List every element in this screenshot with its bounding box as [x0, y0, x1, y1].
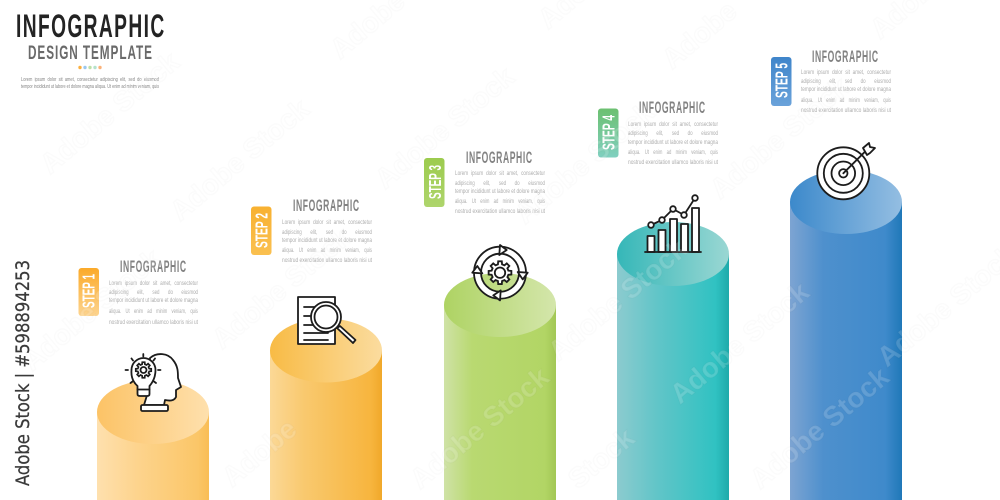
- step 5 block: nostrud exercitation ullamco laboris nisi ut: [801, 108, 891, 114]
- step 1 block: adipiscing elit, sed do eiusmod: [109, 290, 198, 296]
- icon: head with light bulb: [126, 354, 181, 411]
- step 3 block: [424, 148, 546, 215]
- step 1 block: aliqua. Ut enim ad minim veniam, quis: [109, 309, 198, 315]
- cylinder 3: [444, 273, 556, 500]
- step 4 block: Lorem ipsum dolor sit amet, consectetur: [628, 122, 718, 128]
- step 2 block: nostrud exercitation ullamco laboris nisi ut: [282, 258, 372, 264]
- step 2 block: [251, 196, 373, 264]
- title block: INFOGRAPHIC: [16, 8, 164, 44]
- step 5 block: STEP 5: [772, 63, 792, 98]
- watermark text: Stock: [562, 422, 641, 495]
- watermark text: Adobe Stock: [34, 46, 185, 180]
- watermark text: Adobe Stock: [744, 361, 895, 495]
- step 3 block: INFOGRAPHIC: [466, 148, 532, 167]
- step 3 block: Lorem ipsum dolor sit amet, consectetur: [455, 171, 545, 177]
- watermark text: Adobe Stock: [164, 93, 315, 227]
- stock id vertical label: Adobe Stock | #598894253: [12, 260, 34, 486]
- step 4 block: tempor incididunt ut labore et dolore magna: [628, 140, 719, 146]
- icon: target with arrow: [817, 143, 875, 199]
- step 1 block: [78, 257, 199, 326]
- step 2 block: STEP 2: [252, 213, 272, 248]
- step 3 block: aliqua. Ut enim ad minim veniam, quis: [455, 199, 545, 205]
- step 4 block: INFOGRAPHIC: [639, 98, 705, 117]
- step 4 block: STEP 4: [598, 115, 618, 150]
- watermark text: Adobe Stock: [404, 361, 555, 495]
- step 5 block: Lorem ipsum dolor sit amet, consectetur: [801, 70, 891, 76]
- step 4 block: adipiscing elit, sed do eiusmod: [628, 131, 718, 137]
- step 5 block: INFOGRAPHIC: [812, 47, 878, 66]
- cylinder 4: [617, 222, 729, 500]
- step 5 block: tempor incididunt ut labore et dolore magna: [801, 87, 892, 93]
- step 2 block: tempor incididunt ut labore et dolore magna: [282, 238, 373, 244]
- step 4 block: aliqua. Ut enim ad minim veniam, quis: [628, 150, 718, 156]
- watermark text: Adobe Stock: [704, 71, 855, 205]
- watermark text: Adobe Stock: [16, 243, 167, 377]
- step 2 block: adipiscing elit, sed do eiusmod: [282, 230, 372, 236]
- icon: gear in circular arrows: [472, 245, 528, 300]
- watermark text: Adobe Stock: [206, 221, 357, 355]
- step 3 block: adipiscing elit, sed do eiusmod: [455, 181, 545, 187]
- step 1 block: Lorem ipsum dolor sit amet, consectetur: [109, 281, 198, 287]
- step 2 block: INFOGRAPHIC: [293, 196, 359, 215]
- watermark text: Adobe Stock: [509, 96, 660, 230]
- watermark text: Adobe Stock: [664, 276, 815, 410]
- step 5 block: [771, 47, 892, 114]
- title block: DESIGN TEMPLATE: [28, 43, 152, 64]
- watermark text: Adobe Stock: [542, 233, 693, 367]
- icon: document with magnifier: [298, 297, 356, 344]
- cylinder 5: [790, 170, 902, 500]
- step 1 block: STEP 1: [78, 274, 98, 308]
- step 4 block: nostrud exercitation ullamco laboris nisi ut: [628, 160, 718, 166]
- step 2 block: aliqua. Ut enim ad minim veniam, quis: [282, 248, 372, 254]
- step 5 block: aliqua. Ut enim ad minim veniam, quis: [801, 98, 891, 104]
- step 1 block: INFOGRAPHIC: [120, 257, 186, 276]
- step 1 block: tempor incididunt ut labore et dolore magna: [109, 298, 199, 304]
- step 3 block: STEP 3: [425, 165, 445, 199]
- step 1 block: nostrud exercitation ullamco laboris nisi ut: [109, 320, 198, 326]
- title block: Lorem ipsum dolor sit amet, consectetur adipiscing elit, sed do eiusmod: [21, 77, 159, 83]
- step 2 block: Lorem ipsum dolor sit amet, consectetur: [282, 220, 372, 226]
- watermark text: Adobe Stock: [369, 61, 520, 195]
- cylinder 1: [97, 380, 209, 500]
- watermark text: Adobe: [216, 413, 303, 493]
- cylinder 2: [270, 318, 382, 500]
- step 3 block: nostrud exercitation ullamco laboris nisi ut: [455, 209, 545, 215]
- step 5 block: adipiscing elit, sed do eiusmod: [801, 79, 891, 85]
- step 3 block: tempor incididunt ut labore et dolore magna: [455, 189, 546, 195]
- title block: tempor incididunt ut labore et dolore magna aliqua. Ut enim ad minim veniam, quis: [21, 84, 159, 90]
- title block: [16, 8, 164, 90]
- icon: bar chart with trend line: [645, 195, 701, 252]
- step 4 block: [598, 98, 719, 166]
